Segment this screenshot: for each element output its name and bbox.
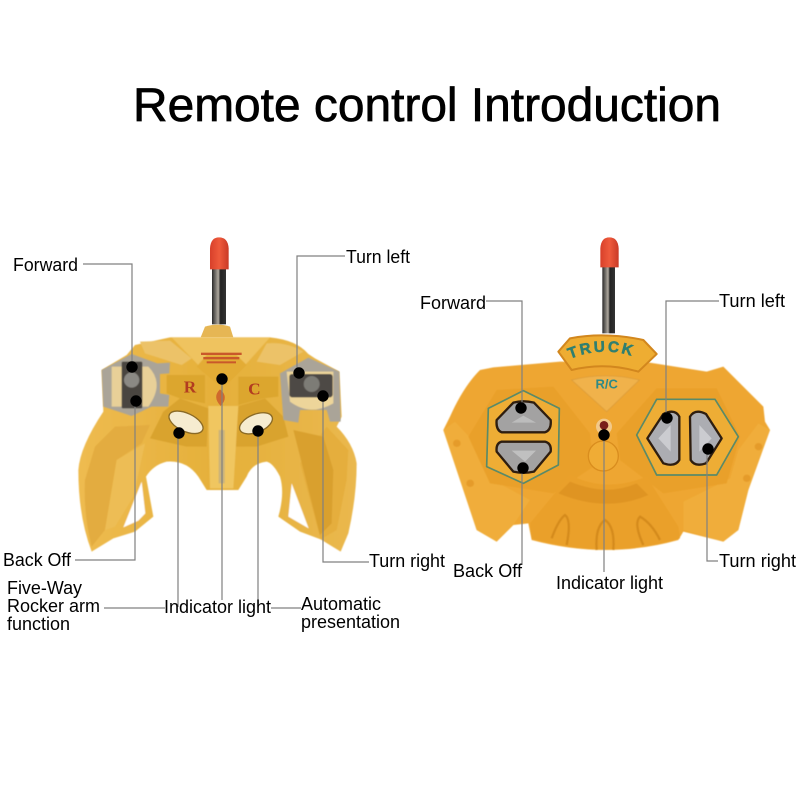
labels: left controller: Back Off — [3, 550, 72, 570]
labels: left controller: Turn right — [369, 551, 445, 571]
labels: right controller: Indicator light — [556, 573, 663, 593]
right remote controller — [442, 237, 771, 551]
labels: right controller — [420, 291, 796, 593]
leader lines: left controller — [75, 256, 369, 608]
labels: right controller: Forward — [420, 293, 486, 313]
automatic presentation buttons — [166, 406, 275, 438]
labels: left controller — [3, 247, 445, 634]
title: Remote control Introduction — [133, 78, 721, 131]
R and C letters — [184, 378, 261, 399]
antenna — [201, 237, 233, 337]
labels: left controller: Forward — [13, 255, 78, 275]
labels: left controller: Five-Way — [7, 578, 82, 598]
left rocker stick — [102, 354, 170, 416]
R/C label: R/C — [595, 377, 618, 392]
emblem stripes — [201, 353, 242, 406]
labels: left controller: Turn left — [346, 247, 410, 267]
labels: left controller: Indicator light — [164, 597, 271, 617]
antenna — [600, 237, 619, 333]
R and C letters: C — [248, 380, 261, 399]
labels: right controller: Turn right — [719, 551, 796, 571]
labels: left controller: function — [7, 614, 70, 634]
controller body — [443, 362, 770, 550]
forward and back pad — [487, 391, 559, 483]
controller body — [78, 337, 357, 552]
truck badge — [557, 334, 658, 372]
marker dots: right controller — [515, 402, 714, 474]
R and C letters: R — [184, 378, 197, 397]
right rocker stick — [280, 358, 341, 423]
left and right pad — [637, 399, 738, 475]
labels: right controller: Turn left — [719, 291, 785, 311]
labels: left controller: presentation — [301, 612, 400, 632]
truck badge: TRUCK — [566, 340, 634, 358]
indicator LED and round button — [588, 419, 618, 471]
labels: left controller: Rocker arm — [7, 596, 100, 616]
left remote controller — [78, 237, 357, 552]
labels: left controller: Automatic — [301, 594, 381, 614]
labels: right controller: Back Off — [453, 561, 523, 581]
leader lines: right controller — [486, 301, 719, 572]
marker dots: left controller — [126, 361, 329, 439]
